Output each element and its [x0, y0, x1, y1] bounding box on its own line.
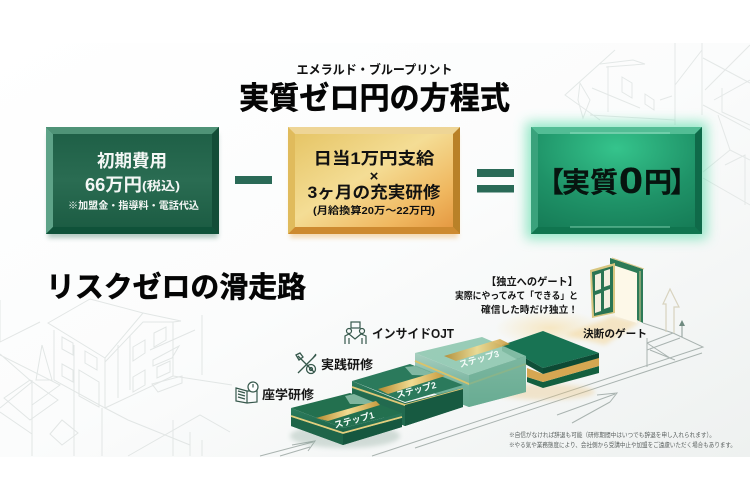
daily allowance text: 日当1万円支給: [314, 148, 435, 168]
gate callout text: [455, 275, 578, 316]
step 1 label: ステップ1: [333, 410, 375, 430]
footnotes: ※自信がなければ辞退も可能（研修期間中はいつでも辞退を申し入れられます）。: [509, 430, 715, 439]
label: practical training: 実践研修: [321, 357, 374, 372]
gate callout text: 【独立へのゲート】: [486, 275, 578, 288]
footnotes: [509, 430, 736, 449]
initial cost text: 初期費用: [97, 151, 167, 171]
zero yen text: 0: [619, 160, 643, 201]
icon: people with sign: [345, 322, 366, 344]
operator: minus: [235, 176, 272, 184]
initial cost text: ※加盟金・指導料・電話代込: [68, 199, 199, 212]
zero yen text: 円: [644, 167, 672, 198]
panel: daily allowance: [288, 127, 460, 238]
icon: open door gate: [565, 258, 644, 345]
initial cost text: 66万円: [85, 175, 142, 195]
step 2 label: ステップ2: [395, 380, 437, 400]
background illustration: house line art upper right: [565, 43, 750, 205]
gate callout text: 確信した時だけ独立！: [481, 304, 578, 316]
zero yen text: 】: [670, 167, 698, 198]
zero yen text: 【: [536, 167, 564, 198]
gate callout text: 実際にやってみて「できる」と: [455, 290, 578, 302]
step 4: decision gate slabs: [495, 310, 605, 400]
step 3 label: ステップ3: [458, 349, 500, 370]
arrow: tall up arrow: [663, 289, 679, 333]
title: 実質ゼロ円の方程式: [239, 81, 510, 116]
daily allowance text: (月給換算20万～22万円): [313, 204, 435, 217]
zero yen text: 実質: [562, 167, 618, 198]
label: inside OJT: インサイドOJT: [372, 327, 454, 341]
panel: initial cost: [46, 127, 219, 238]
panel: effectively zero yen: [526, 122, 707, 239]
label: decision gate: 決断のゲート: [583, 327, 647, 340]
step 3 block: [415, 337, 526, 407]
icon: book and clock: [236, 382, 258, 403]
initial cost text: [68, 151, 199, 212]
daily allowance text: ×: [370, 168, 379, 185]
background illustration: house line art lower left: [0, 299, 232, 456]
subtitle: エメラルド・ブループリント: [296, 62, 452, 77]
icon: wrench and gear: [296, 353, 316, 374]
daily allowance text: [308, 148, 441, 217]
step 1 block: [290, 393, 402, 448]
zero yen text: [536, 160, 698, 201]
arrow: small up arrow: [679, 320, 685, 337]
initial cost text: (税込): [142, 178, 180, 193]
section heading: リスクゼロの滑走路: [46, 271, 306, 304]
operator: equals: [477, 169, 514, 192]
runway lines and arrows: [260, 323, 703, 456]
label: classroom training: 座学研修: [262, 387, 315, 402]
daily allowance text: 3ヶ月の充実研修: [308, 183, 441, 202]
step 2 block: [352, 364, 463, 426]
